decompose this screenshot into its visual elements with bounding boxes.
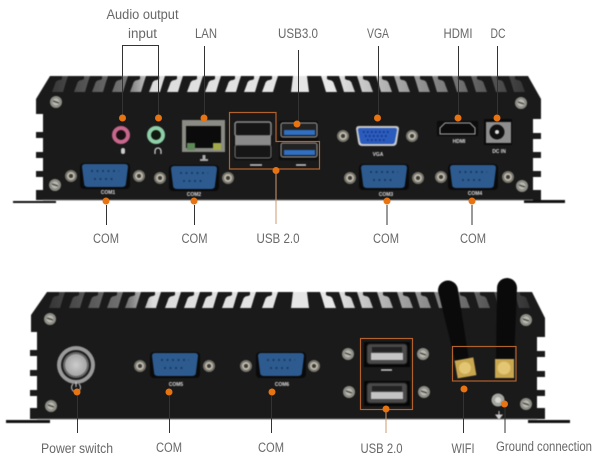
power switch xyxy=(57,346,95,392)
COM ports (front) xyxy=(65,163,514,198)
VGA port xyxy=(337,126,418,158)
heat sink gaps xyxy=(52,76,525,92)
VGA port: VGA xyxy=(373,152,384,158)
WIFI antennas and connectors xyxy=(438,278,517,378)
side fins xyxy=(36,114,541,200)
label: COM 2: COM xyxy=(182,231,208,246)
label: USB3.0: USB3.0 xyxy=(278,26,318,41)
COM ports (front): COM3 xyxy=(379,192,393,198)
panel: front chassis xyxy=(13,76,565,203)
COM ports (front): COM2 xyxy=(187,192,201,198)
label: DC: DC xyxy=(490,26,506,41)
screws xyxy=(49,96,528,192)
DC power jack xyxy=(484,119,512,155)
COM ports (front): COM1 xyxy=(101,190,115,196)
HDMI port: HDMI xyxy=(453,139,466,145)
leader line: USB 2.0 front xyxy=(275,173,277,224)
leader lines: front COM ports xyxy=(106,205,472,225)
audio jacks xyxy=(112,126,165,154)
USB 2.0 ports (front) xyxy=(234,121,272,165)
chassis body and fins xyxy=(31,292,545,419)
label: COM 1: COM xyxy=(93,231,119,246)
label: VGA: VGA xyxy=(367,26,389,41)
mounting feet xyxy=(13,200,565,203)
label: input: input xyxy=(128,26,157,41)
mounting feet xyxy=(6,420,570,423)
USB 3.0 ports xyxy=(279,121,318,165)
side fins xyxy=(30,332,545,419)
label: COM 3: COM xyxy=(373,231,399,246)
leader lines: rear ports xyxy=(78,393,505,433)
label: Audio output: Audio output xyxy=(106,7,179,22)
bottom edge xyxy=(43,200,533,201)
LAN port xyxy=(182,120,225,161)
leader line: USB 2.0 rear xyxy=(385,412,387,433)
USB 2.0 highlight box (rear) xyxy=(360,338,412,410)
WIFI highlight box xyxy=(452,346,516,381)
COM ports (front): COM4 xyxy=(468,191,482,197)
USB 2.0 highlight box (front) xyxy=(230,112,320,169)
label: Power switch: Power switch xyxy=(41,441,113,456)
COM ports (rear): COM5 xyxy=(169,382,183,388)
DC power jack: DC IN xyxy=(492,149,506,155)
label: LAN: LAN xyxy=(195,26,217,41)
USB 2.0 ports (rear) xyxy=(342,342,430,406)
ground screw xyxy=(492,394,504,419)
label: COM 5: COM xyxy=(156,440,182,455)
leader line: audio bracket xyxy=(122,46,158,115)
HDMI port xyxy=(437,121,478,145)
label: HDMI: HDMI xyxy=(444,26,472,41)
screws xyxy=(44,313,532,412)
chassis body and fins xyxy=(36,76,541,200)
label: USB 2.0 front: USB 2.0 xyxy=(256,231,300,246)
panel: rear chassis xyxy=(6,292,570,423)
label: COM 4: COM xyxy=(460,231,486,246)
orange marker dots xyxy=(74,114,508,412)
COM ports (rear) xyxy=(134,352,320,388)
leader lines: top ports xyxy=(204,46,498,122)
label: USB 2.0 rear: USB 2.0 xyxy=(360,441,402,456)
label: WIFI: WIFI xyxy=(452,441,474,456)
bottom edge xyxy=(37,418,537,420)
heat sink gaps xyxy=(49,292,530,308)
label: COM 6: COM xyxy=(258,440,284,455)
COM ports (rear): COM6 xyxy=(275,382,289,388)
